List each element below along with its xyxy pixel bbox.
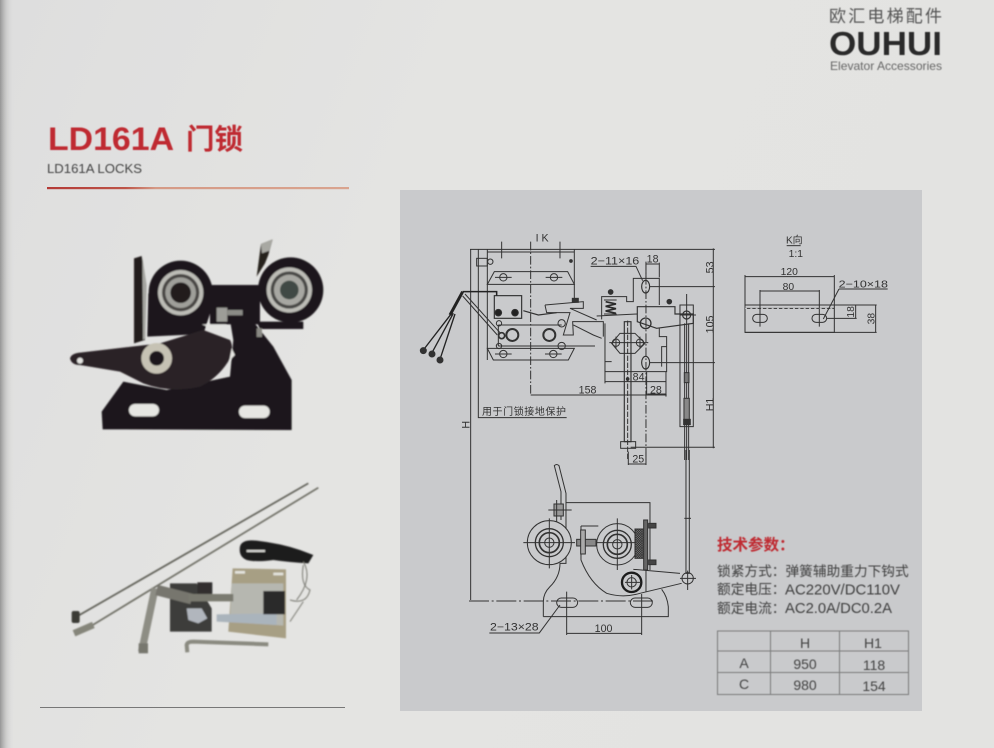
drawing: side elevation with rollers: 2−13×28	[490, 622, 539, 634]
drawing: view K detail: 120	[781, 267, 798, 278]
drawing: front elevation of lock	[420, 233, 717, 600]
parameters table	[718, 631, 908, 694]
technical parameters list: 额定电流：	[717, 601, 785, 616]
parameters table: H1	[864, 635, 882, 651]
drawing: view K detail	[745, 233, 888, 332]
technical parameters list: AC2.0A/DC0.2A	[785, 601, 892, 617]
parameters table: 154	[862, 678, 886, 694]
parameters table: A	[739, 655, 749, 671]
brand logo: Elevator Accessories	[830, 59, 942, 73]
drawing: view K detail: K向	[786, 233, 803, 246]
brand logo: 欧汇电梯配件	[829, 7, 942, 26]
parameters table: C	[739, 676, 749, 692]
drawing: front elevation of lock: 84	[633, 372, 645, 384]
drawing: view K detail: 2−10×18	[839, 279, 888, 290]
technical parameters list	[717, 564, 909, 617]
parameters table: 980	[793, 677, 817, 693]
drawing: front elevation of lock: 用于门锁接地保护	[482, 405, 566, 418]
drawing: view K detail: 38	[866, 313, 877, 324]
bottom rule	[40, 707, 345, 708]
drawing: view K detail: 1:1	[789, 249, 803, 260]
drawing: front elevation of lock: 28	[650, 384, 662, 396]
brand logo	[829, 7, 942, 73]
technical parameters list: 额定电压：	[717, 582, 785, 597]
technical parameters heading: 技术参数：	[717, 535, 795, 554]
parameters table: H	[800, 635, 810, 651]
drawing: front elevation of lock: H1	[705, 398, 717, 411]
parameters table: 118	[863, 657, 885, 673]
title: LD161A	[48, 121, 174, 157]
drawing: front elevation of lock: 158	[579, 384, 597, 396]
drawing: front elevation of lock: 53	[705, 261, 717, 273]
subtitle: LD161A LOCKS	[47, 161, 142, 176]
drawing: front elevation of lock: I K	[536, 233, 549, 245]
technical parameters list: 锁紧方式：弹簧辅助重力下钩式	[717, 564, 909, 579]
drawing: front elevation of lock: 2−11×16	[591, 256, 639, 268]
parameters table: 950	[793, 656, 817, 672]
brand logo: OUHUI	[829, 25, 942, 62]
drawing: front elevation of lock: 18	[647, 254, 659, 266]
title rule	[47, 187, 349, 189]
title: 门锁	[186, 124, 243, 156]
technical parameters list: AC220V/DC110V	[785, 582, 900, 598]
drawing: side elevation with rollers	[469, 450, 696, 635]
drawing: side elevation with rollers: 25	[632, 454, 644, 466]
photo: assembled door lock	[70, 239, 323, 430]
drawing: view K detail: 80	[783, 282, 794, 293]
title	[48, 121, 243, 157]
drawing: front elevation of lock: 105	[705, 315, 717, 333]
drawing: front elevation of lock: H	[460, 421, 472, 429]
drawing: side elevation with rollers: 100	[595, 623, 613, 635]
drawing: view K detail: 18	[846, 306, 857, 318]
panel: technical drawing	[400, 190, 922, 711]
photo: lock parts kit	[72, 483, 318, 653]
